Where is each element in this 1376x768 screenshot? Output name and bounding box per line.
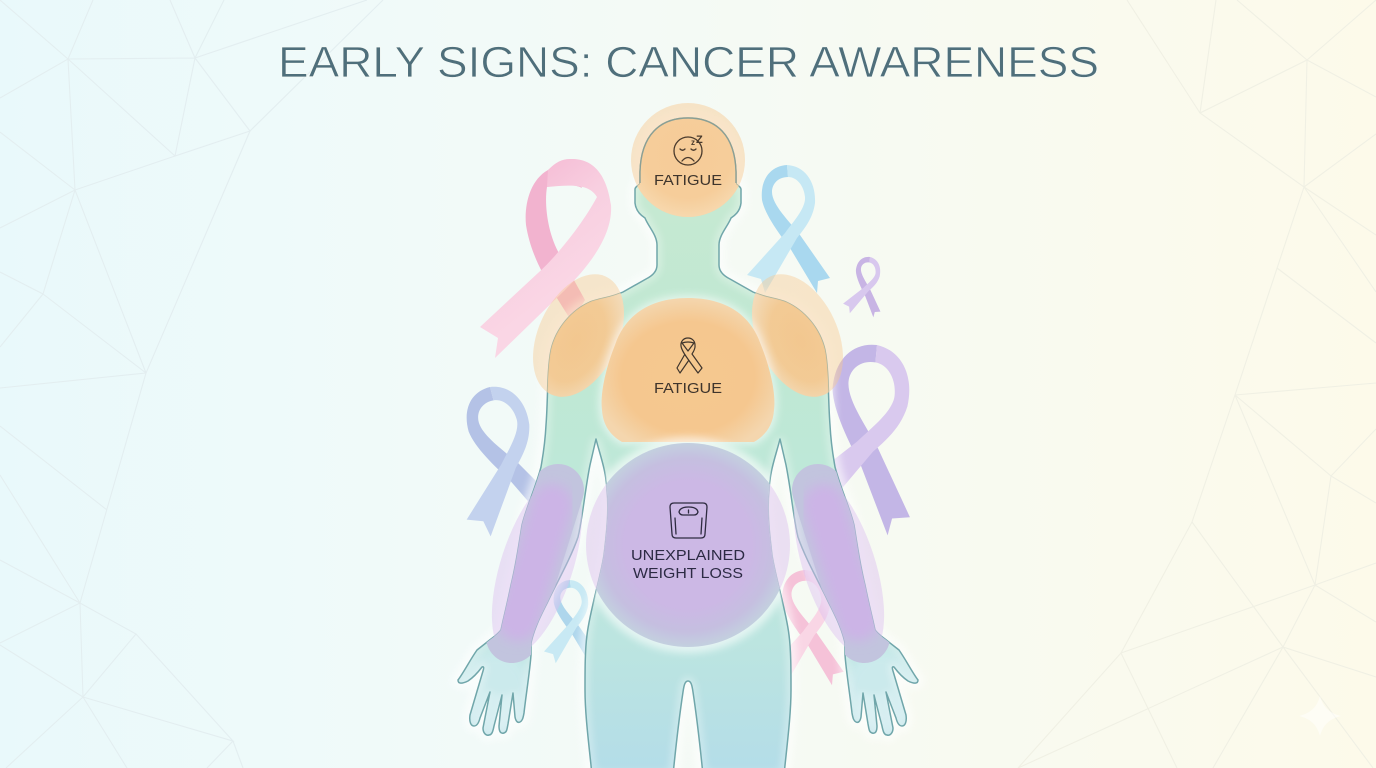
ribbon: pink lower right (769, 570, 844, 685)
ribbon: light blue top right (747, 165, 830, 293)
ribbon: pale blue lower left (544, 580, 598, 663)
label: unexplained weight loss: UNEXPLAINED (631, 547, 745, 564)
label: unexplained weight loss (631, 547, 745, 582)
highlight: right arm purple (792, 464, 890, 663)
highlight: left shoulder orange (533, 274, 624, 397)
highlight: head orange (631, 103, 745, 217)
background polygon lines left (0, 0, 383, 768)
icon: sleepy face: Z (696, 134, 703, 146)
icon: weighing scale (670, 503, 707, 538)
title: EARLY SIGNS: CANCER AWARENESS (278, 38, 1099, 87)
highlight: belly purple (580, 437, 796, 653)
ribbon: small purple (842, 254, 889, 318)
highlight: right shoulder orange (752, 274, 843, 397)
icon: sleepy face: z (691, 138, 695, 147)
highlight: chest orange (602, 298, 774, 442)
label: fatigue (chest): FATIGUE (654, 380, 722, 397)
ribbon: large pink (480, 159, 611, 358)
icon: awareness ribbon (677, 338, 702, 373)
label: fatigue (head): FATIGUE (654, 172, 722, 189)
background polygon lines right (1018, 0, 1376, 768)
ribbon: large lavender (788, 335, 938, 539)
watermark sparkle (1299, 696, 1341, 736)
icon: sleepy face (674, 134, 703, 165)
ribbon: periwinkle left (445, 378, 564, 540)
human body silhouette (457, 118, 919, 768)
label: unexplained weight loss: WEIGHT LOSS (633, 565, 743, 582)
highlight: left arm purple (486, 464, 584, 663)
